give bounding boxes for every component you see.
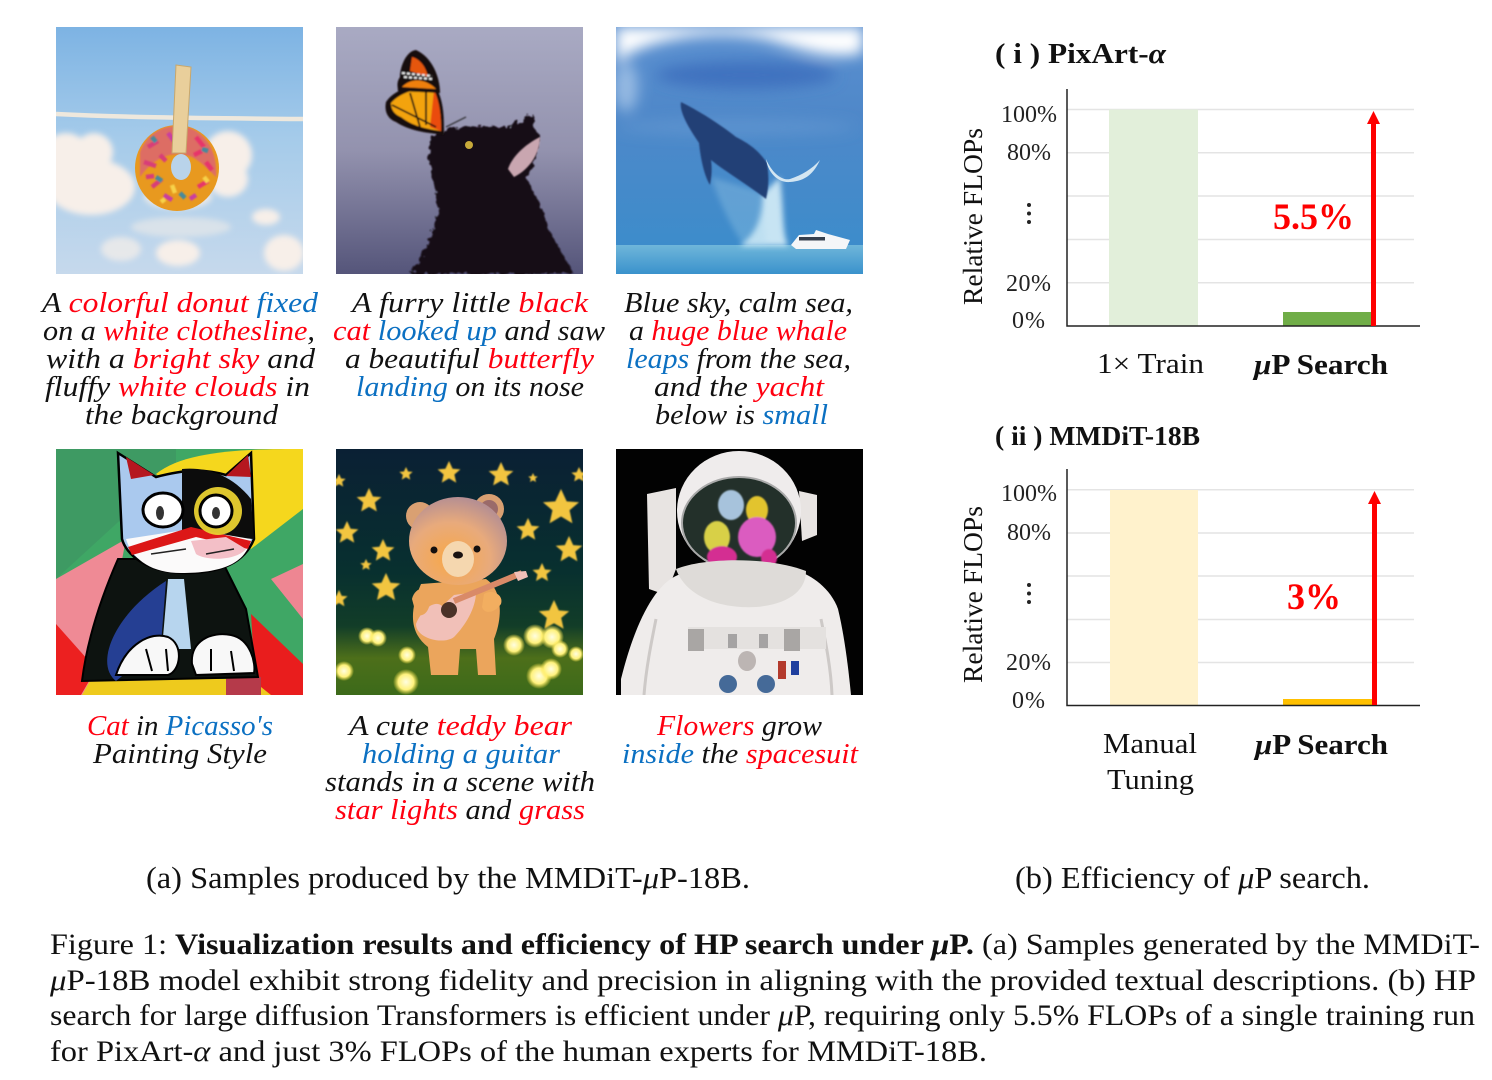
butterfly lower wing [385,85,444,135]
image: astronaut with flowers in helmet [616,449,863,695]
caption: Picasso cat: Painting Style [92,739,267,770]
x label: 1x train: 1× Train [1097,348,1205,380]
image: black cat with butterfly [336,27,583,274]
x label: muP search: μP Search [1252,349,1388,381]
red arrow [1368,491,1381,705]
caption: whale: Blue sky, calm sea, [624,288,853,319]
caption: teddy bear: A cute teddy bear [347,711,572,742]
caption: teddy bear [325,711,595,826]
gridlines and tick labels: 20% [1006,650,1051,676]
image: donut on clothesline [56,27,303,274]
bar: manual tuning [1110,490,1198,705]
caption: donut: A colorful donut fixed [40,288,319,319]
value: 3%: 3% [1287,577,1341,618]
caption: whale: and the yacht [654,372,825,403]
panel: chart PixArt-alpha [958,38,1420,381]
chart title: ( i ) PixArt- α [995,38,1167,70]
panel: chart MMDiT-18B [958,421,1420,796]
figure caption paragraph: Figure 1: Visualization results and efficiency of HP search under μP. (a) Samples generated by the MMDiT- [50,928,1480,961]
caption: donut [40,288,319,431]
caption: donut: with a bright sky and [46,344,316,375]
chart title: ( ii ) MMDiT-18B [995,421,1200,451]
image: whale leaping over the sea [616,27,863,274]
subcaption (a): (a) Samples produced by the MMDiT- μP-18B. [146,860,750,895]
x label: manual tuning [1103,728,1197,796]
caption: whale: below is small [655,400,828,431]
figure caption paragraph: for PixArt- α and just 3% FLOPs of the human experts for MMDiT-18B. [50,1035,987,1068]
gridlines and tick labels: 0% [1012,688,1045,714]
caption: cat and butterfly: landing on its nose [356,372,584,403]
caption: donut: the background [85,400,279,431]
subcaption (b): (b) Efficiency of μP search. [1015,860,1370,895]
caption: cat and butterfly [333,288,605,403]
caption: donut: on a white clothesline , [43,316,315,347]
caption: spacesuit [622,711,859,770]
caption: donut: fluffy white clouds in [45,372,310,403]
image: teddy bear with guitar [336,449,583,695]
caption: spacesuit: inside the spacesuit [622,739,859,770]
bar: 1x train [1109,110,1198,326]
figure caption paragraph: μP-18B model exhibit strong fidelity and precision in aligning with the provided textual descriptions. (b) HP [49,964,1476,997]
gridlines and tick labels: 20% [1006,271,1051,297]
gridlines and tick labels: 80% [1007,140,1051,166]
panel: samples from MMDiT-muP-18B [40,27,863,826]
caption: teddy bear: star lights and grass [335,795,585,826]
caption: spacesuit: Flowers grow [656,711,822,742]
value: 5.5%: 5.5% [1273,197,1354,238]
gridlines and tick labels: 0% [1012,308,1045,334]
red arrow [1367,111,1380,326]
caption: Picasso cat [87,711,273,770]
axes [1067,89,1420,326]
bar: muP search [1283,312,1372,326]
bar: muP search [1283,699,1373,705]
y axis label: Relative FLOPs [958,128,988,305]
caption: cat and butterfly: a beautiful butterfly [345,344,595,375]
caption: whale: leaps from the sea, [626,344,851,375]
gridlines and tick labels: 100% [1001,481,1057,507]
image: cat in Picasso style [56,449,303,695]
caption: whale: a huge blue whale [629,316,847,347]
gridlines and tick labels [1001,102,1414,334]
caption: cat and butterfly: cat looked up and saw [333,316,605,347]
x label: manual tuning: Tuning [1107,764,1194,796]
figure caption paragraph: search for large diffusion Transformers is efficient under μP, requiring only 5.5% FLOPs of a single training run [50,999,1475,1032]
x label: muP search: μP Search [1253,729,1388,761]
caption: teddy bear: holding a guitar [362,739,560,770]
caption: cat and butterfly: A furry little black [350,288,589,319]
caption: whale [624,288,853,431]
figure caption paragraph [49,928,1480,1068]
gridlines and tick labels: 100% [1001,102,1057,128]
caption: teddy bear: stands in a scene with [325,767,595,798]
caption: Picasso cat: Cat in Picasso's [87,711,273,742]
axes [1067,469,1420,706]
x label: manual tuning: Manual [1103,728,1197,760]
butterfly upper wing [398,50,440,93]
gridlines and tick labels: 80% [1007,520,1051,546]
y axis label: Relative FLOPs [958,506,988,683]
gridlines and tick labels [1001,481,1414,714]
